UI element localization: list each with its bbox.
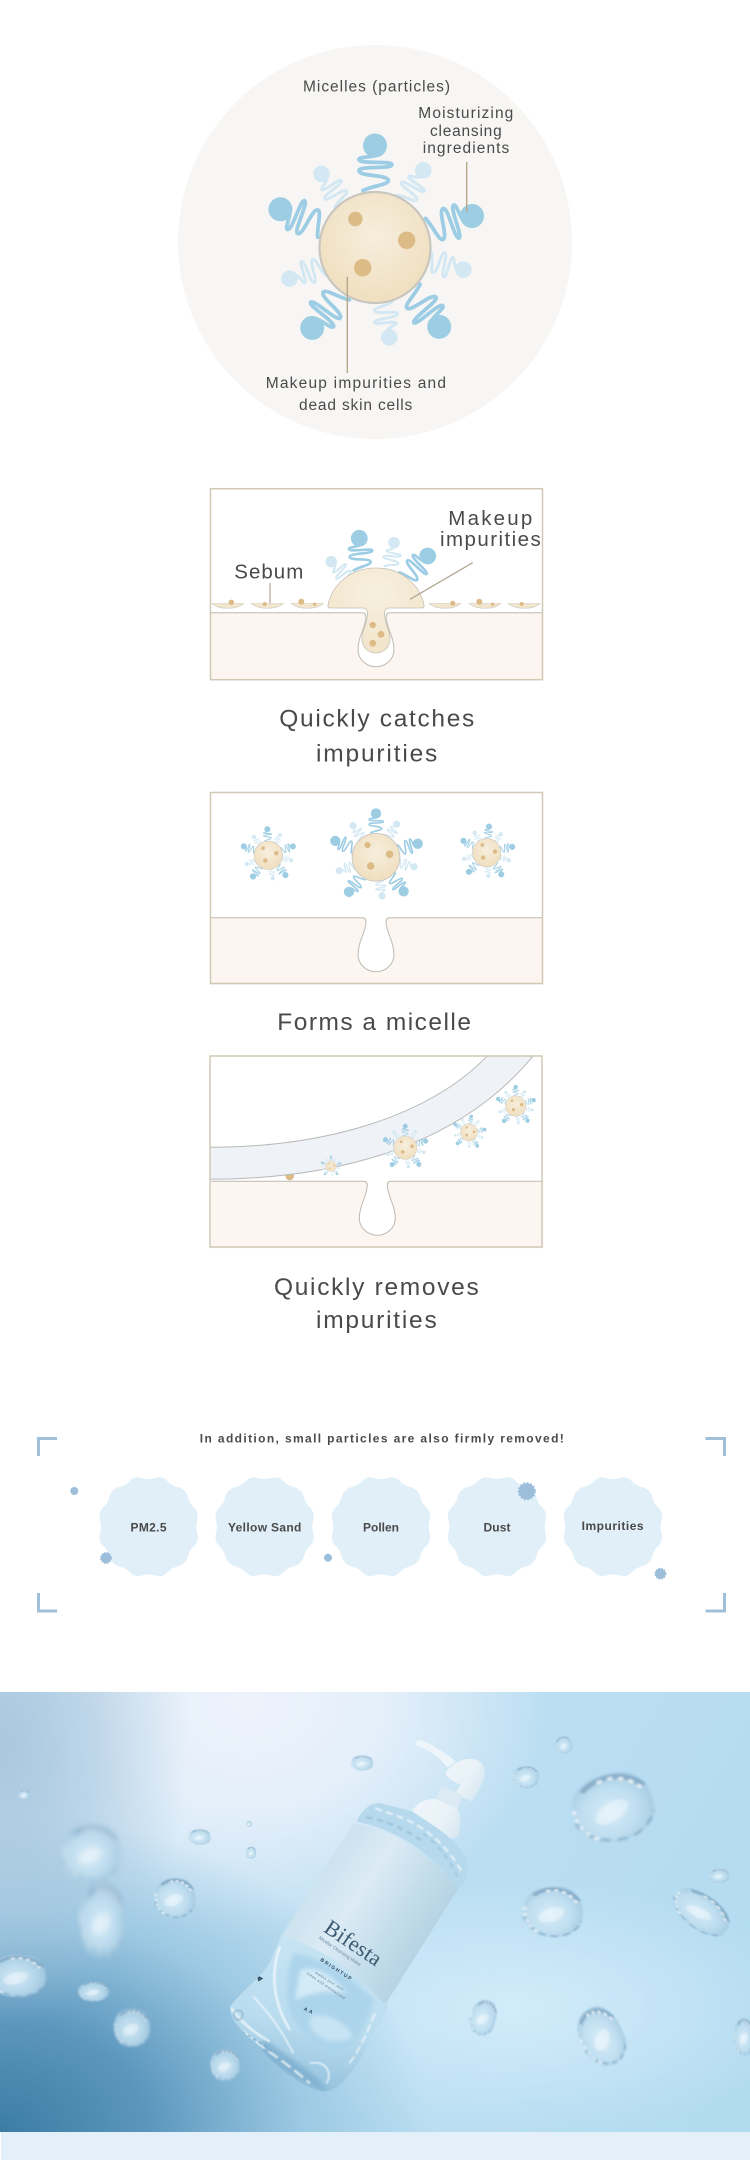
floating particles: [70, 1483, 666, 1579]
small description on bottle: makes your skin: [314, 1971, 344, 1992]
label: sebum: Sebum: [234, 560, 303, 583]
pump cap: [412, 1799, 460, 1842]
panel frame: [210, 1056, 542, 1247]
panel frame: [210, 792, 542, 984]
caption: quickly catches impurities: [279, 706, 474, 768]
badge: dust: [448, 1477, 546, 1576]
label: makeup impurities: impurities: [440, 528, 541, 551]
label: moisturizing cleansing ingredients: [418, 105, 513, 157]
badge: impurities: [564, 1477, 662, 1576]
caption: quickly removes impurities: [274, 1274, 479, 1334]
label: moisturizing cleansing ingredients: Moisturizing: [418, 105, 513, 122]
panel: quickly removes impurities: [210, 1056, 543, 1248]
caption: quickly catches impurities: impurities: [316, 741, 437, 768]
badge: pollen: Pollen: [363, 1520, 399, 1534]
micelle: center: [328, 808, 425, 900]
bottom band: [1, 2132, 750, 2160]
label: makeup impurities and dead skin cells: dead skin cells: [299, 397, 413, 414]
sebum plug: [328, 568, 424, 653]
skin with pore: [210, 918, 542, 985]
label: makeup impurities and dead skin cells: Makeup impurities and: [266, 375, 446, 392]
badge: yellow sand: Yellow Sand: [228, 1520, 301, 1534]
skin with pore: [211, 1181, 543, 1248]
impurity dots in pore: [369, 622, 384, 647]
micelle diagram panel: [178, 45, 572, 439]
caption: quickly removes impurities: Quickly removes: [274, 1274, 479, 1301]
badge: yellow sand: [215, 1477, 314, 1576]
size mark on bottle: AA: [302, 2006, 314, 2016]
small particles section: [38, 1432, 724, 1611]
badge: PM2.5: PM2.5: [130, 1520, 167, 1534]
water drops: [0, 1734, 750, 2081]
badge: pollen: [332, 1477, 430, 1576]
upper water section: [357, 1803, 468, 1888]
leader line: sebum: [269, 583, 271, 603]
panel frame: [210, 489, 542, 680]
bottle label: [282, 1823, 458, 2005]
caption: quickly removes impurities: impurities: [316, 1307, 437, 1334]
label: moisturizing cleansing ingredients: ingredients: [423, 140, 510, 157]
skin with pore: [210, 613, 542, 680]
lower water section: [230, 1935, 388, 2092]
label: micelles: Micelles (particles): [303, 78, 450, 96]
leftover impurity: [285, 1172, 294, 1180]
micelle: left: [239, 825, 298, 882]
pump head: [445, 1759, 485, 1802]
section heading: In addition, small particles are also firmly removed!: [200, 1432, 564, 1446]
product bottle: [230, 1740, 485, 2092]
upper water ripples: [367, 1808, 462, 1878]
caption: quickly catches impurities: Quickly catches: [279, 706, 474, 733]
sebum droplets: [212, 599, 540, 608]
brand text on bottle: Micellar Cleansing Water: [318, 1935, 362, 1968]
pump collar: [433, 1787, 463, 1813]
micelle: right: [456, 821, 518, 881]
label: makeup impurities: [440, 507, 541, 551]
panel: forms a micelle: [210, 792, 542, 985]
panel: quickly catches impurities: [210, 489, 542, 680]
label: makeup impurities and dead skin cells: [266, 375, 446, 414]
surfactant arms on sebum: [321, 529, 442, 587]
leader line: impurities: [346, 277, 348, 373]
micelle particle: [263, 134, 489, 347]
label: makeup impurities: Makeup: [448, 507, 532, 530]
pump spout: [416, 1740, 456, 1767]
wipe band: [210, 1056, 533, 1179]
badge: impurities: Impurities: [582, 1519, 644, 1533]
badge: dust: Dust: [484, 1520, 510, 1534]
leader line: moisturizing ingredients: [466, 162, 468, 212]
brand text on bottle: Bifesta: [320, 1914, 387, 1971]
banner background: [0, 1692, 750, 2132]
small description on bottle: clean and moisturized: [306, 1972, 346, 2000]
caption: forms a micelle: Forms a micelle: [277, 1009, 471, 1036]
variant name on bottle: BRIGHTUP: [319, 1957, 353, 1982]
water ripples: [232, 1947, 375, 2092]
badge: PM2.5: [99, 1477, 198, 1576]
label: moisturizing cleansing ingredients: cleansing: [430, 123, 502, 140]
micelles lifted away: [320, 1085, 537, 1176]
leader line: makeup impurities: [410, 563, 473, 599]
frame corners: [38, 1438, 724, 1611]
